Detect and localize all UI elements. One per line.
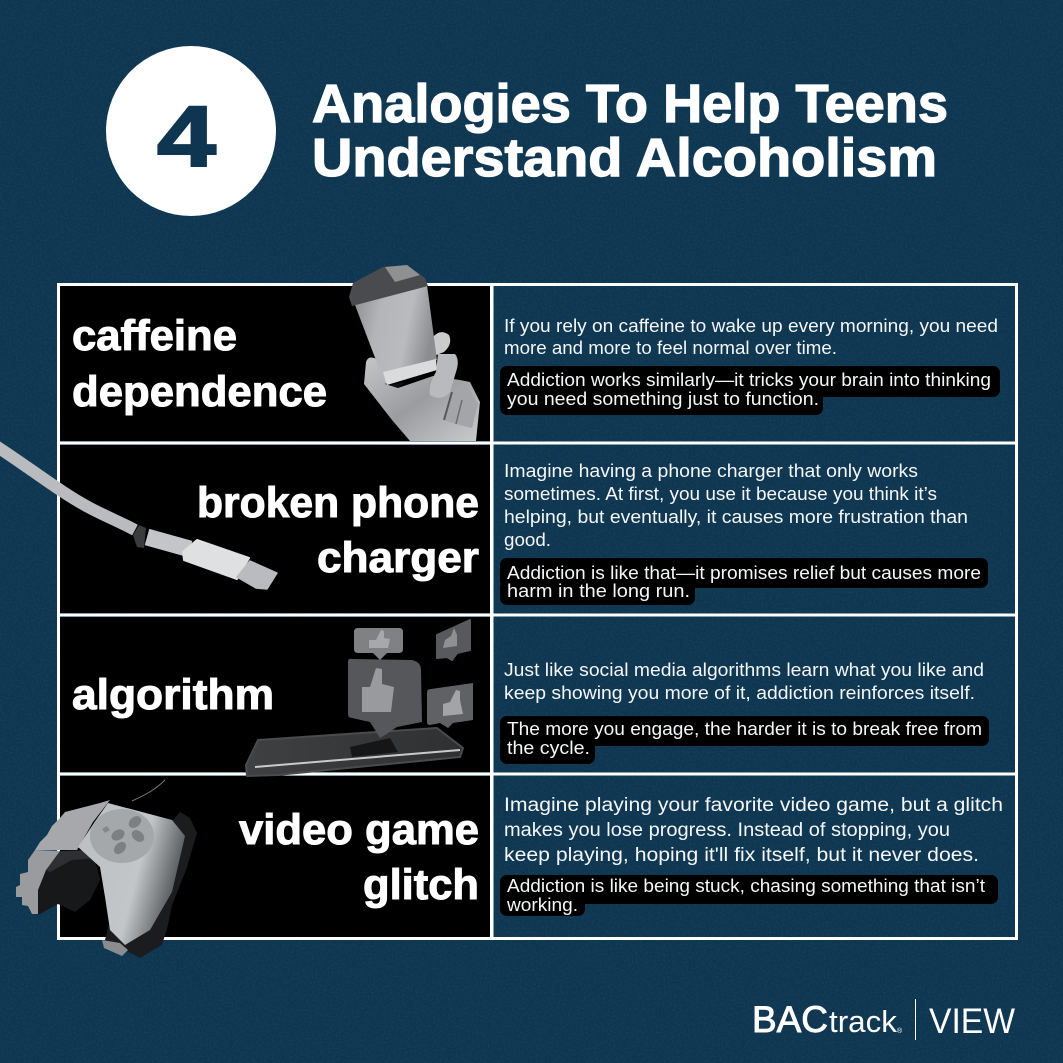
row 4 heading: video game glitch [239, 806, 479, 909]
illustration: broken phone cable [0, 446, 277, 589]
row 3 body text [504, 660, 984, 703]
title [312, 74, 948, 188]
row 3 callout [500, 716, 989, 764]
row 4 callout: working. [506, 895, 578, 915]
row 1 callout [500, 366, 1000, 415]
row 2 heading: broken phone charger [197, 479, 479, 582]
row 4 callout [500, 875, 998, 916]
row 2 body text [504, 461, 968, 550]
row 1 callout: you need something just to function. [507, 389, 819, 409]
logo: BACtrack VIEW: VIEW [929, 1002, 1015, 1041]
logo: BACtrack VIEW [752, 999, 1015, 1041]
row 3 callout: The more you engage, the harder it is to break free from [507, 719, 982, 739]
row 2 body text: good. [504, 530, 551, 550]
row 4 body text: makes you lose progress. Instead of stopping, you [504, 820, 950, 841]
illustration: phone with like bubbles [246, 620, 473, 776]
row 1 callout: Addiction works similarly—it tricks your brain into thinking [507, 370, 991, 390]
number badge: 4 [157, 89, 216, 185]
row 1 body text: If you rely on caffeine to wake up every morning, you need [504, 316, 998, 336]
illustration: coffee cup in hand [349, 265, 480, 441]
title: Analogies To Help Teens [312, 74, 948, 134]
title: Understand Alcoholism [312, 128, 937, 188]
table frame [58, 284, 1016, 938]
row 3 body text: Just like social media algorithms learn what you like and [504, 660, 984, 680]
row 2 body text: sometimes. At first, you use it because you think it’s [504, 484, 937, 504]
row 1 body text [504, 316, 998, 358]
row 4 heading: video game glitch: video game [239, 806, 479, 854]
row 1 heading: caffeine dependence [72, 312, 327, 416]
logo: BACtrack VIEW: ® [897, 1027, 903, 1035]
row 4 callout: Addiction is like being stuck, chasing something that isn’t [507, 876, 985, 896]
row 1 body text: more and more to feel normal over time. [504, 338, 837, 358]
row 2 heading: broken phone charger: charger [317, 534, 479, 582]
number badge [106, 46, 276, 216]
row 3 heading: algorithm: algorithm [72, 671, 274, 719]
row 4 body text: Imagine playing your favorite video game, but a glitch [504, 795, 1003, 816]
row 3 callout: the cycle. [507, 738, 590, 758]
illustration: pixelated game controller [16, 780, 197, 958]
row 2 callout: harm in the long run. [507, 581, 690, 601]
row 2 body text: helping, but eventually, it causes more frustration than [504, 507, 968, 527]
row 2 callout [500, 558, 988, 605]
row 4 heading: video game glitch: glitch [363, 861, 479, 909]
logo: BACtrack VIEW: BAC [752, 999, 828, 1040]
row 2 heading: broken phone charger: broken phone [197, 479, 479, 527]
logo: BACtrack VIEW: track [829, 1004, 897, 1039]
row 2 body text: Imagine having a phone charger that only works [504, 461, 918, 481]
row 4 body text [504, 795, 1003, 866]
row 2 callout: Addiction is like that—it promises relief but causes more [507, 563, 981, 583]
row 4 body text: keep playing, hoping it'll fix itself, but it never does. [504, 845, 979, 866]
row 1 heading: caffeine dependence: caffeine [72, 312, 237, 360]
row 1 heading: caffeine dependence: dependence [72, 368, 327, 416]
row 3 body text: keep showing you more of it, addiction reinforces itself. [504, 683, 975, 703]
